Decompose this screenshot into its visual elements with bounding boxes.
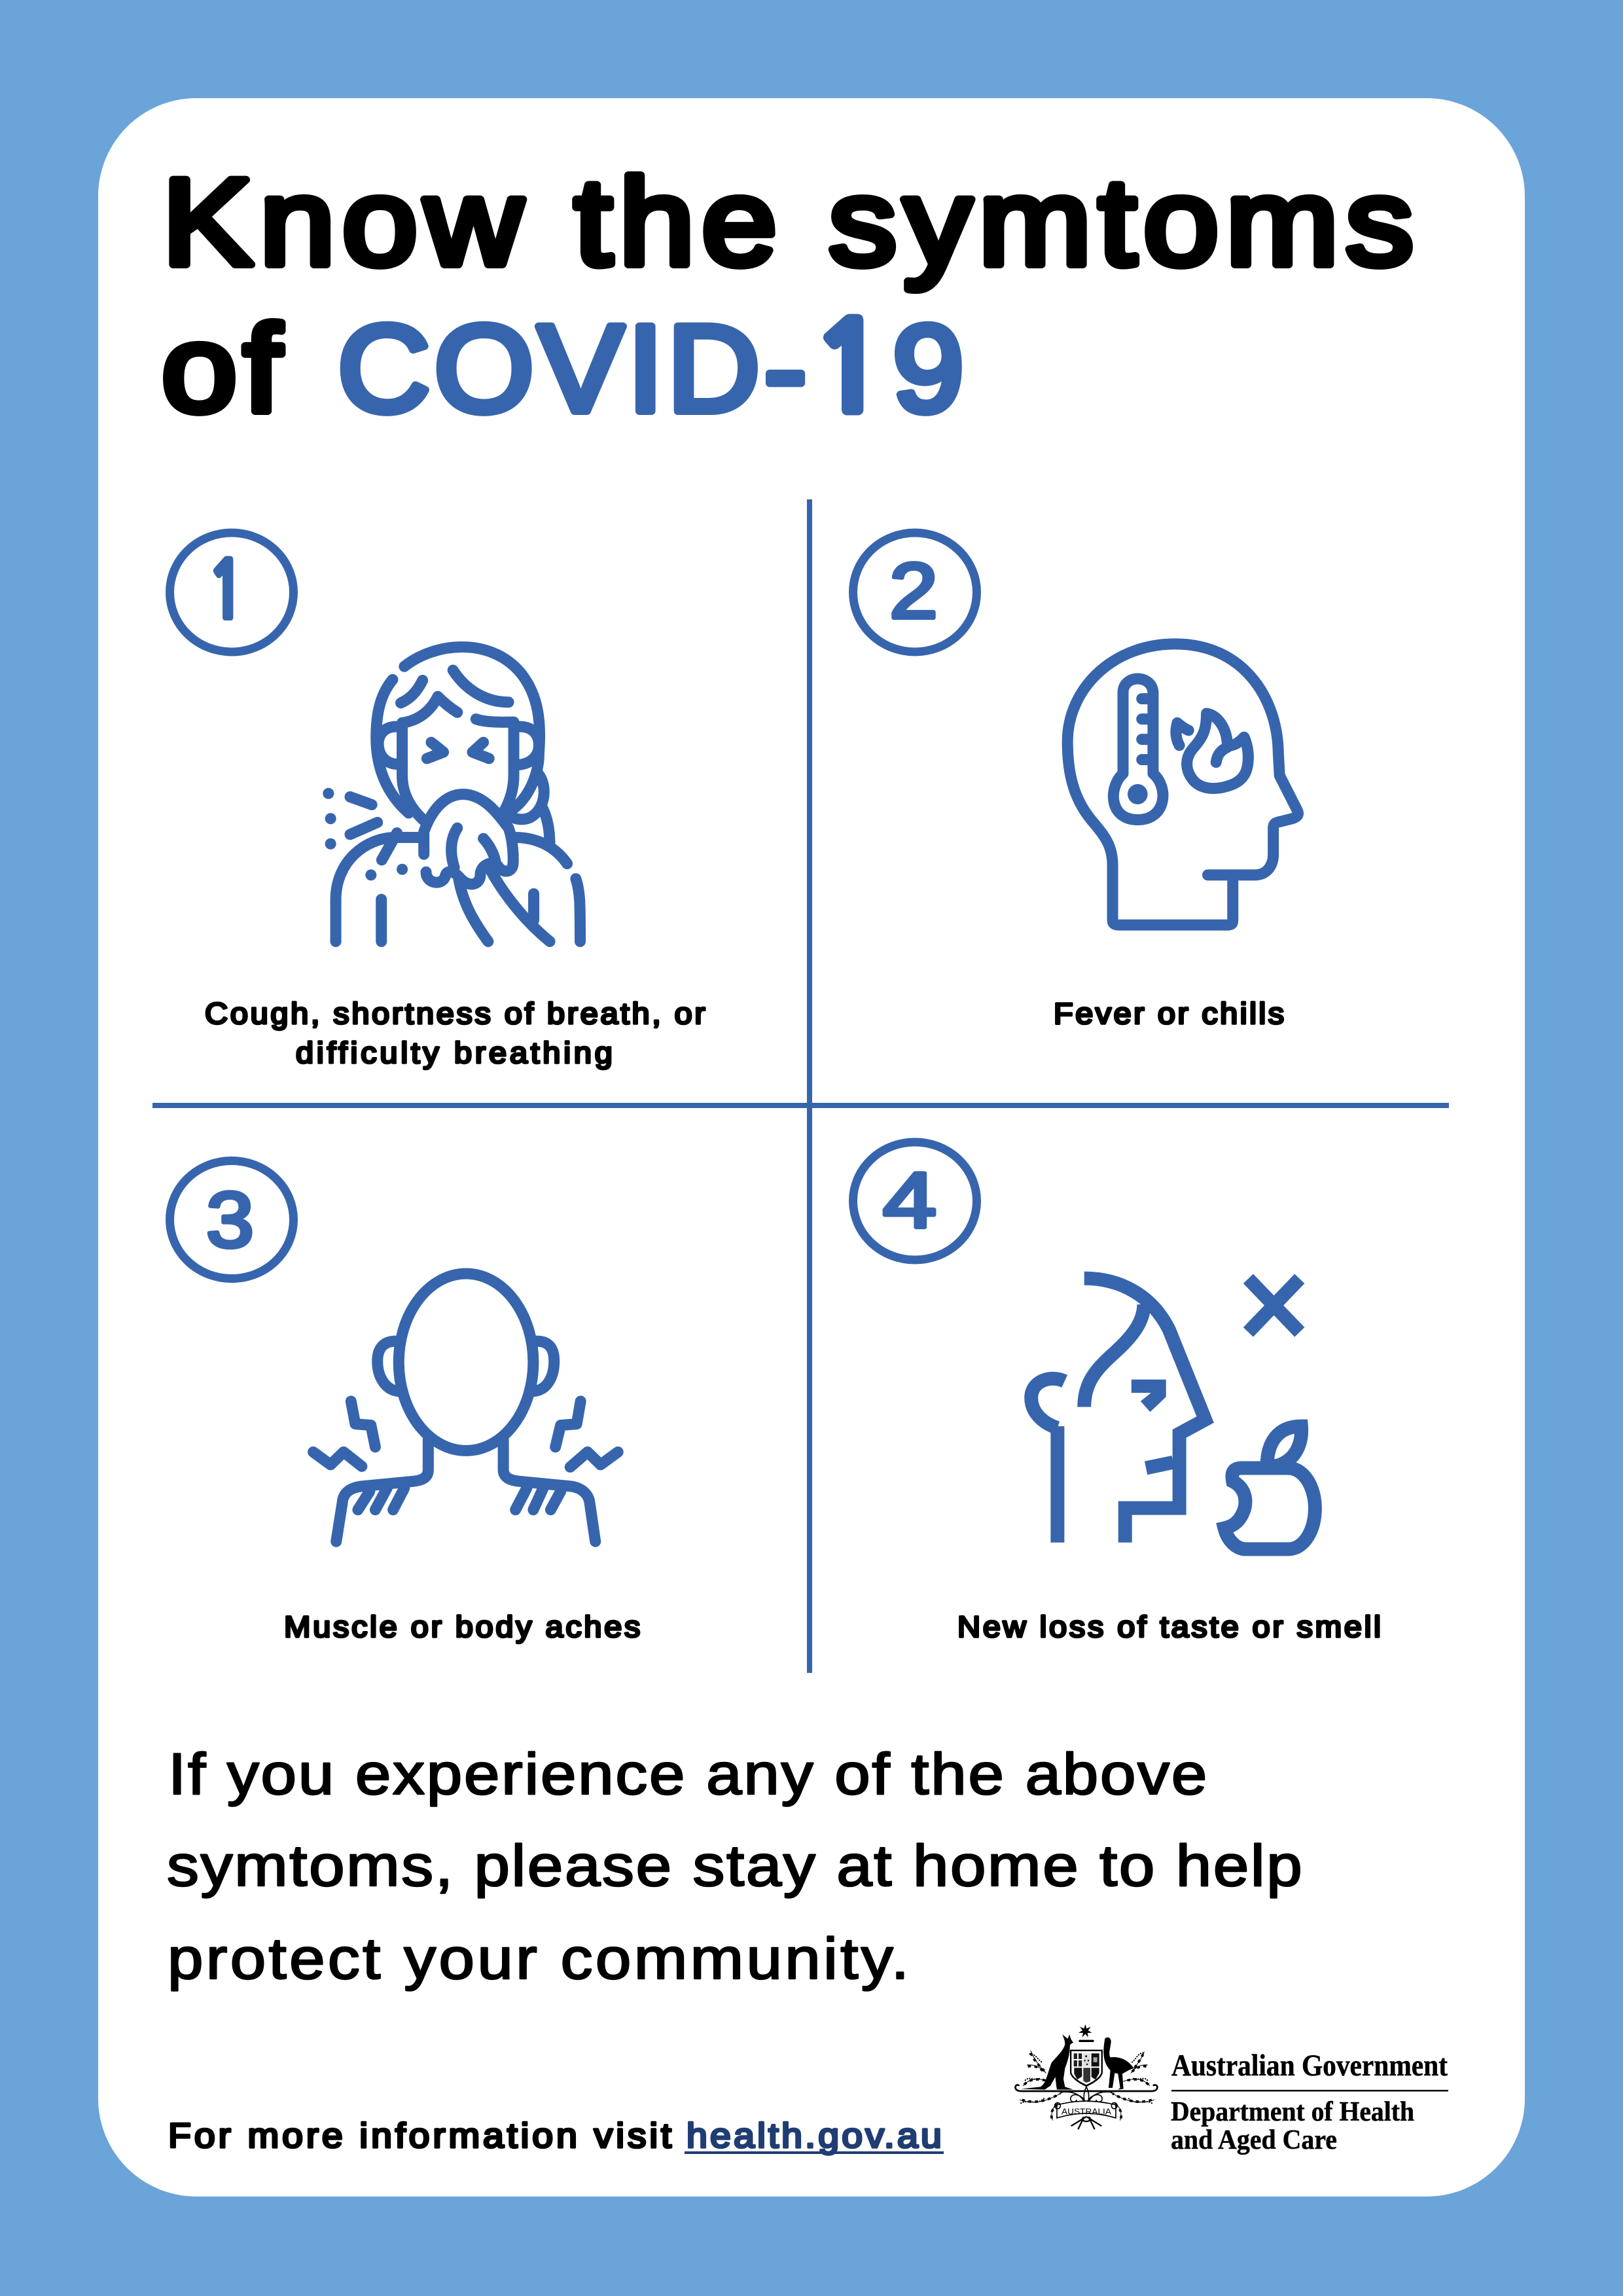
perch	[1015, 2085, 1157, 2091]
number badge 4: 4	[883, 1157, 936, 1244]
government logo	[1015, 2024, 1448, 2155]
number badge 3: 3	[206, 1176, 254, 1264]
number badge 1	[170, 533, 293, 652]
caption: taste and smell: New loss of taste or smell	[957, 1611, 1381, 1643]
logo text: Australian Government	[1171, 2049, 1448, 2083]
number badge 1: 1	[207, 552, 246, 630]
centre stems	[1060, 2087, 1113, 2106]
panel: cough	[170, 533, 705, 1069]
icon: head with thermometer and flame	[1067, 644, 1298, 925]
title: of	[162, 300, 282, 437]
panel: taste and smell	[853, 1142, 1381, 1643]
wattle sprays	[1020, 2051, 1154, 2120]
advice text: symtoms, please stay at home to help	[167, 1833, 1302, 1898]
number badge 2: 2	[889, 547, 938, 635]
advice text: protect your community.	[168, 1926, 909, 1991]
scroll with motto: AUSTRALIA	[1061, 2108, 1112, 2117]
title: COVID-19	[338, 299, 964, 437]
number badge 2	[853, 533, 976, 652]
knot	[1071, 2117, 1101, 2129]
panel: fever	[853, 533, 1298, 1030]
caption: cough: Cough, shortness of breath, or	[205, 997, 705, 1030]
footer link line: For more information visit	[168, 2116, 671, 2155]
icon: person coughing	[329, 647, 580, 941]
star	[1079, 2024, 1092, 2037]
caption: cough	[205, 997, 705, 1069]
panel: aches	[170, 1161, 640, 1643]
scroll with motto	[1055, 2101, 1117, 2118]
caption: fever: Fever or chills	[1054, 997, 1284, 1030]
icon: profile with apple and cross	[1031, 1278, 1315, 1549]
logo text	[1171, 2049, 1448, 2155]
footer link line: health.gov.au	[687, 2116, 942, 2155]
coat of arms	[1015, 2024, 1157, 2129]
advice text: If you experience any of the above	[168, 1741, 1207, 1806]
number badge 3	[170, 1161, 293, 1279]
title	[162, 153, 1414, 437]
footer link line	[168, 2116, 944, 2155]
advice text	[167, 1741, 1302, 1991]
shield	[1070, 2050, 1103, 2087]
logo text: Department of Health	[1171, 2097, 1414, 2127]
caption: cough: difficulty breathing	[296, 1037, 613, 1069]
emu	[1103, 2037, 1134, 2090]
icon: head with aching shoulders	[313, 1274, 618, 1541]
title: Know the symtoms	[162, 153, 1414, 291]
kangaroo	[1021, 2034, 1073, 2090]
caption: aches: Muscle or body aches	[284, 1611, 640, 1643]
logo text: and Aged Care	[1171, 2125, 1337, 2155]
number badge 4	[853, 1142, 976, 1260]
